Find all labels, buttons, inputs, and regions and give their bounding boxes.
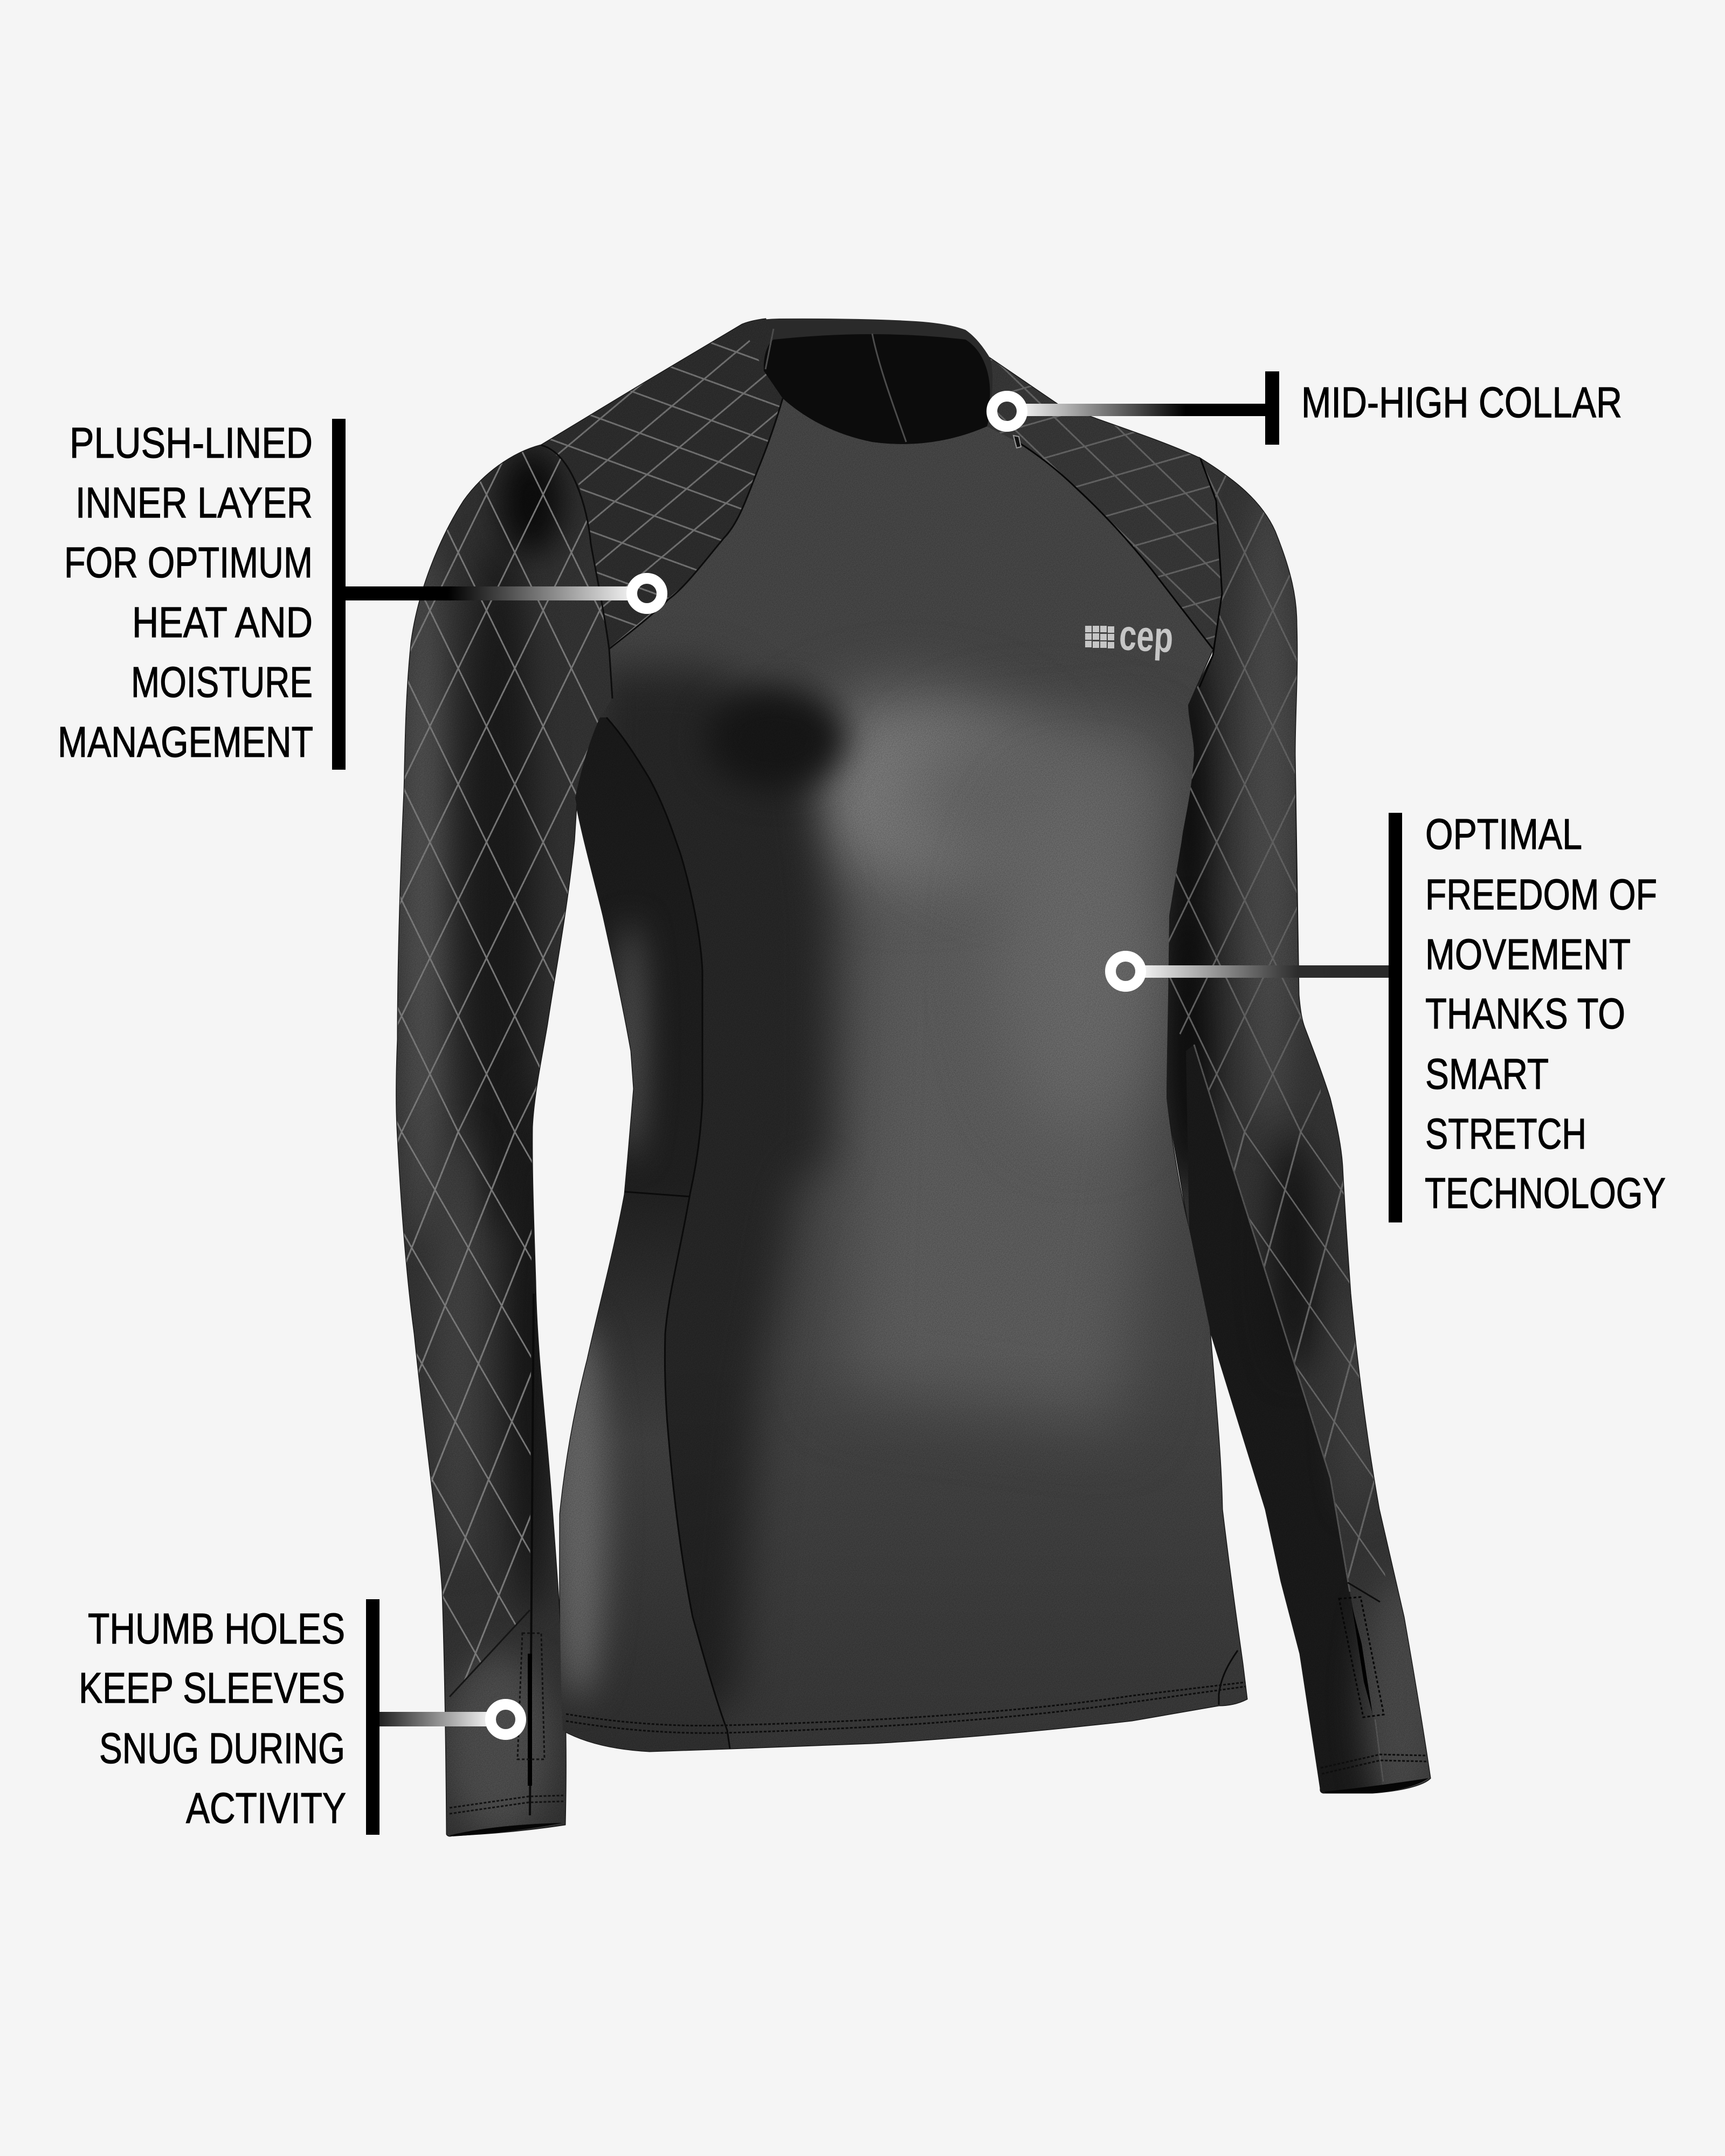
product image: long sleeve base layer shirt bbox=[377, 296, 1455, 1860]
marker ring bbox=[992, 396, 1022, 426]
callout text: INNER LAYER bbox=[75, 479, 313, 527]
cep logo bbox=[1085, 611, 1175, 661]
left sleeve bbox=[397, 445, 612, 1836]
callout: plush-lined inner layer bbox=[58, 419, 662, 770]
shirt underlay closing gaps between panels bbox=[397, 319, 1430, 1836]
marker ring bbox=[632, 578, 662, 609]
marker ring bbox=[1110, 956, 1141, 986]
vertical bar bbox=[366, 1599, 380, 1835]
lattice pattern on right sleeve bbox=[1159, 431, 1429, 1617]
torso front bbox=[539, 398, 1294, 1779]
callout text: THUMB HOLES bbox=[88, 1605, 345, 1653]
right sleeve bbox=[1169, 459, 1430, 1793]
left cuff seams and thumb hole bbox=[450, 1294, 563, 1836]
logo wordmark: cep bbox=[1118, 611, 1175, 661]
callout text: MANAGEMENT bbox=[58, 718, 313, 766]
callout: thumb holes bbox=[79, 1599, 521, 1835]
callout text: TECHNOLOGY bbox=[1425, 1169, 1666, 1217]
callout text: FOR OPTIMUM bbox=[64, 538, 313, 586]
callout: mid-high collar bbox=[992, 371, 1622, 445]
callout text: PLUSH-LINED bbox=[70, 419, 313, 467]
callout text bbox=[1425, 810, 1666, 1217]
vertical bar bbox=[1389, 813, 1402, 1222]
logo grid mark bbox=[1085, 626, 1114, 648]
zipper pull at collar bbox=[1013, 436, 1021, 448]
callout text: OPTIMAL bbox=[1425, 810, 1582, 858]
callout text: FREEDOM OF bbox=[1425, 870, 1657, 918]
connector line bbox=[346, 586, 631, 600]
right cuff seams and thumb hole bbox=[1194, 1045, 1429, 1793]
callout text: STRETCH bbox=[1425, 1110, 1586, 1158]
torso seams and hem stitching bbox=[566, 717, 1245, 1749]
callout text bbox=[58, 419, 313, 766]
connector line bbox=[380, 1712, 488, 1726]
callout text: HEAT AND bbox=[132, 598, 313, 646]
callout text: MID-HIGH COLLAR bbox=[1301, 378, 1622, 426]
callout text: MOISTURE bbox=[131, 658, 313, 706]
callout text: ACTIVITY bbox=[186, 1784, 346, 1832]
callout text: MOVEMENT bbox=[1425, 930, 1631, 978]
vertical bar bbox=[332, 419, 346, 770]
fabric grain bbox=[377, 296, 1455, 1860]
vertical bar bbox=[1265, 371, 1279, 445]
callout text: KEEP SLEEVES bbox=[79, 1664, 345, 1712]
lattice pattern on left sleeve bbox=[397, 452, 604, 1680]
marker ring bbox=[491, 1704, 521, 1735]
callout: freedom of movement bbox=[1110, 810, 1666, 1222]
connector line bbox=[1024, 404, 1265, 416]
callout text: SNUG DURING bbox=[99, 1724, 345, 1772]
collar bbox=[742, 319, 992, 444]
right shoulder panel bbox=[986, 356, 1229, 687]
callout text: THANKS TO bbox=[1425, 990, 1625, 1038]
callout text: SMART bbox=[1425, 1050, 1549, 1098]
left side panel bbox=[539, 717, 730, 1757]
callout text bbox=[79, 1605, 346, 1832]
connector line bbox=[1143, 965, 1389, 978]
left shoulder panel bbox=[539, 318, 787, 699]
